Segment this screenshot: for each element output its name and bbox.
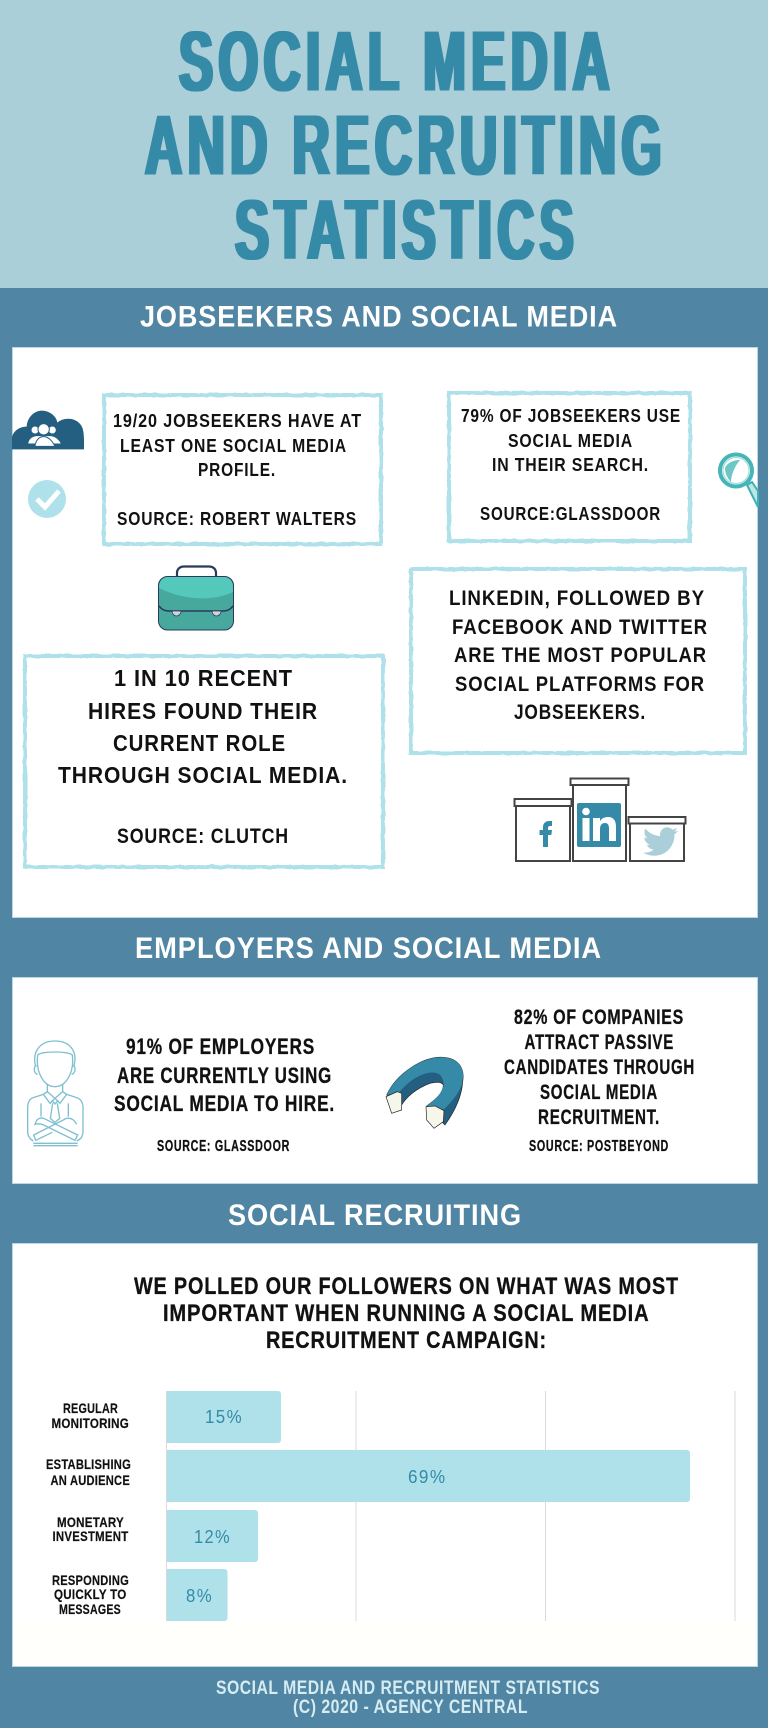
category labels: AN AUDIENCE xyxy=(50,1472,130,1488)
text: 91% of employers xyxy=(114,1034,335,1155)
icon: social media podium xyxy=(514,778,686,861)
heading: social recruiting: SOCIAL RECRUITING xyxy=(228,1199,522,1232)
callout: linkedin, facebook and twitter xyxy=(411,569,745,753)
text: 91% of employers: 91% OF EMPLOYERS xyxy=(126,1034,315,1059)
callout: linkedin, facebook and twitter: FACEBOOK AND TWITTER xyxy=(452,616,708,639)
callout: linkedin, facebook and twitter: LINKEDIN, FOLLOWED BY xyxy=(449,587,705,610)
callout: 79% of jobseekers: IN THEIR SEARCH. xyxy=(492,454,649,475)
text: 82% of companies: CANDIDATES THROUGH xyxy=(504,1056,695,1079)
callout: 19/20 jobseekers xyxy=(104,395,381,544)
bar values: 15% xyxy=(205,1407,243,1427)
heading: employers: EMPLOYERS AND SOCIAL MEDIA xyxy=(135,932,602,965)
text: 91% of employers: SOURCE: GLASSDOOR xyxy=(157,1138,290,1155)
title xyxy=(145,14,667,278)
bar values: 8% xyxy=(186,1586,213,1606)
panel: social recruiting xyxy=(12,1244,758,1666)
icon: magnet xyxy=(386,1057,463,1128)
icon: facebook xyxy=(540,821,552,847)
title banner xyxy=(0,0,768,288)
panel: employers xyxy=(12,978,758,1184)
icon: check mark xyxy=(28,480,66,518)
category labels: REGULAR xyxy=(63,1400,118,1416)
category labels: MESSAGES xyxy=(59,1601,121,1617)
category labels: ESTABLISHING xyxy=(46,1456,131,1472)
footer xyxy=(216,1678,600,1718)
heading: jobseekers: JOBSEEKERS AND SOCIAL MEDIA xyxy=(140,300,618,334)
callout: 19/20 jobseekers: PROFILE. xyxy=(198,459,276,480)
bar chart xyxy=(46,1391,735,1621)
callout: 79% of jobseekers: SOCIAL MEDIA xyxy=(508,430,633,451)
callout: 79% of jobseekers xyxy=(449,393,690,541)
text: 91% of employers: ARE CURRENTLY USING xyxy=(117,1063,332,1088)
text: 91% of employers: SOCIAL MEDIA TO HIRE. xyxy=(114,1091,335,1116)
callout: 1 in 10 recent hires xyxy=(25,656,383,867)
category labels: INVESTMENT xyxy=(52,1528,129,1544)
icon: cloud with people xyxy=(12,411,84,449)
category labels: MONETARY xyxy=(57,1514,124,1530)
category labels xyxy=(46,1400,131,1617)
text: 82% of companies: SOURCE: POSTBEYOND xyxy=(529,1138,669,1155)
text: 82% of companies xyxy=(504,1006,695,1155)
callout: 1 in 10 recent hires: THROUGH SOCIAL MEDIA. xyxy=(58,762,348,788)
callout: 79% of jobseekers: 79% OF JOBSEEKERS USE xyxy=(461,405,681,426)
callout: 1 in 10 recent hires: CURRENT ROLE xyxy=(113,730,286,756)
callout: 1 in 10 recent hires: 1 IN 10 RECENT xyxy=(114,665,293,691)
callout: 1 in 10 recent hires: HIRES FOUND THEIR xyxy=(88,698,318,724)
callout: 19/20 jobseekers: SOURCE: ROBERT WALTERS xyxy=(117,508,357,529)
footer: SOCIAL MEDIA AND RECRUITMENT STATISTICS xyxy=(216,1678,600,1699)
footer: (C) 2020 - AGENCY CENTRAL xyxy=(293,1697,528,1718)
callout: 79% of jobseekers: SOURCE:GLASSDOOR xyxy=(480,503,661,524)
category labels: RESPONDING xyxy=(52,1572,129,1588)
bar values: 12% xyxy=(194,1527,231,1547)
callout: 1 in 10 recent hires: SOURCE: CLUTCH xyxy=(117,825,289,848)
category labels: MONITORING xyxy=(52,1415,129,1431)
bar values xyxy=(186,1407,446,1606)
icon: twitter xyxy=(643,827,678,856)
text: 82% of companies: 82% OF COMPANIES xyxy=(514,1006,684,1029)
text: poll heading: IMPORTANT WHEN RUNNING A SOCIAL MEDIA xyxy=(163,1300,650,1327)
bars xyxy=(167,1391,690,1621)
text: 82% of companies: RECRUITMENT. xyxy=(538,1106,660,1129)
icon: magnifying glass xyxy=(720,454,758,507)
callout: linkedin, facebook and twitter: SOCIAL PLATFORMS FOR xyxy=(455,673,705,696)
text: poll heading xyxy=(134,1273,679,1354)
icon: briefcase xyxy=(158,566,234,630)
callout: 19/20 jobseekers: LEAST ONE SOCIAL MEDIA xyxy=(120,435,347,456)
text: poll heading: RECRUITMENT CAMPAIGN: xyxy=(266,1327,547,1354)
icon: businessman with crossed arms xyxy=(28,1041,83,1146)
callout: linkedin, facebook and twitter: JOBSEEKERS. xyxy=(514,701,646,724)
panel: jobseekers xyxy=(12,348,758,918)
category labels: QUICKLY TO xyxy=(54,1586,126,1602)
text: 82% of companies: SOCIAL MEDIA xyxy=(540,1081,658,1104)
callout: linkedin, facebook and twitter: ARE THE MOST POPULAR xyxy=(454,644,707,667)
icon: linkedin xyxy=(577,803,621,847)
bar values: 69% xyxy=(408,1467,446,1487)
text: 82% of companies: ATTRACT PASSIVE xyxy=(524,1031,674,1054)
callout: 19/20 jobseekers: 19/20 JOBSEEKERS HAVE AT xyxy=(113,410,362,431)
